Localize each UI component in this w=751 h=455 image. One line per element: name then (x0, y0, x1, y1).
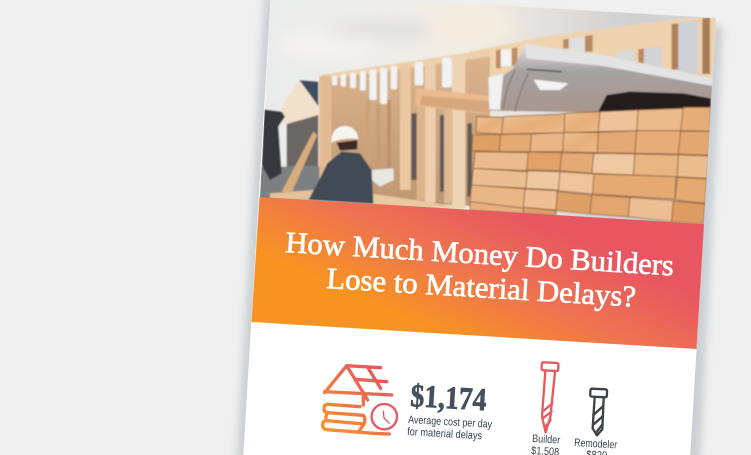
icon: builder nail (541, 362, 559, 432)
stat description (407, 414, 493, 442)
back frame (470, 17, 716, 78)
infographic page mockup (234, 0, 726, 455)
remodeler label (574, 437, 618, 455)
builder label (531, 433, 561, 455)
title banner (252, 197, 704, 349)
builder label: Builder (532, 433, 561, 447)
clouds (298, 22, 420, 50)
stat description: for material delays (407, 426, 483, 442)
stat value: $1,174 (410, 377, 488, 417)
icon: house roof (325, 366, 392, 405)
icon: remodeler screw (590, 389, 607, 435)
page shadow (236, 0, 723, 455)
icon: house with lumber and clock (323, 366, 397, 434)
sky gaps (332, 56, 464, 104)
banner background (252, 197, 704, 349)
lumber stack (470, 107, 711, 224)
studs (319, 55, 465, 209)
banner title: Lose to Material Delays? (326, 262, 637, 314)
stat description: Average cost per day (408, 414, 493, 431)
diagonal brace (282, 132, 317, 193)
banner title: How Much Money Do Builders (285, 226, 675, 282)
horizontal beam (415, 88, 490, 114)
lower plates (373, 194, 460, 208)
construction photo (260, 0, 716, 224)
pale material (372, 168, 394, 187)
dark gaps (411, 113, 472, 197)
page sheet (243, 0, 716, 455)
distant house and ground (258, 80, 320, 200)
left worker (262, 100, 285, 180)
remodeler label: Remodeler (574, 437, 618, 451)
blueprint roll (488, 44, 713, 113)
banner title (285, 226, 675, 314)
front wall framing (262, 49, 490, 209)
stat: average cost per day (407, 377, 493, 442)
icon: lumber stack (323, 404, 389, 434)
sky (262, 0, 716, 224)
central worker (308, 126, 373, 204)
icon: clock (372, 404, 397, 429)
